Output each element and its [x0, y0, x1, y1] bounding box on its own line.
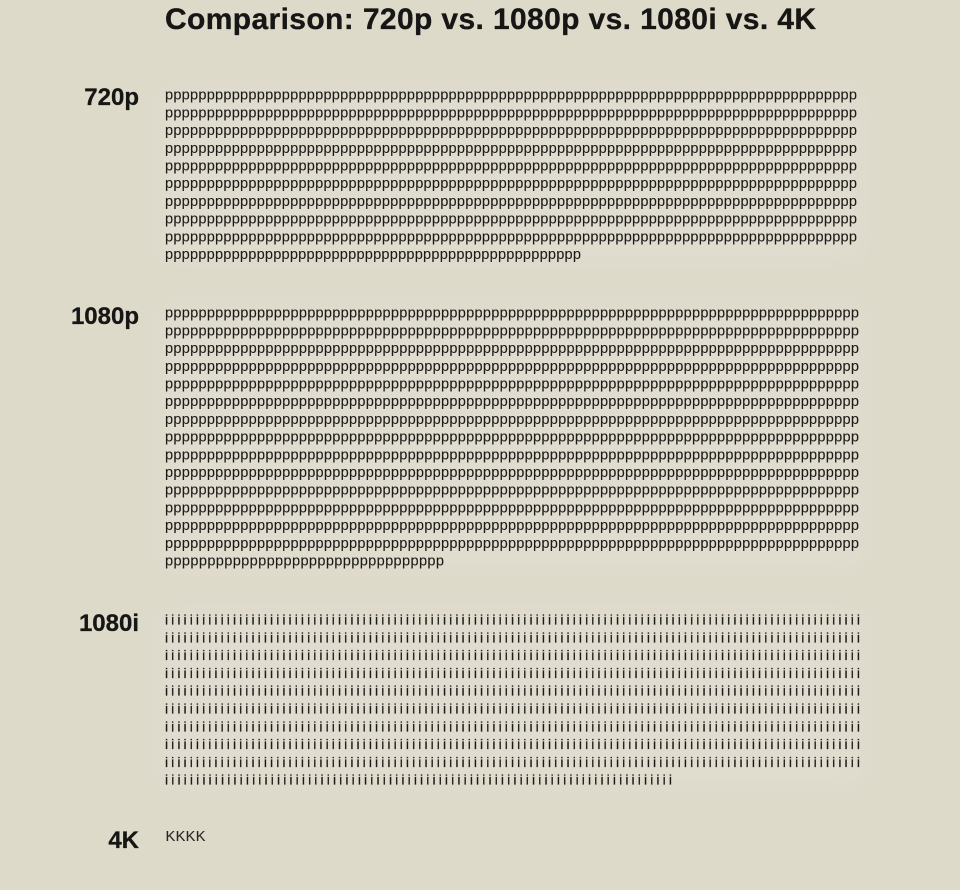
text block: 1080p rows of letter p: ppppppppppppppppppppppppppppppppppppppppppppppppppppppppppppppppppppppppppppppppppp: [165, 518, 859, 534]
text block: 720p rows of letter p: pppppppppppppppppppppppppppppppppppppppppppppppppp: [165, 247, 581, 263]
label: 4K: 4K: [108, 827, 140, 854]
text block: 1080p rows of letter p: ppppppppppppppppppppppppppppppppppppppppppppppppppppppppppppppppppppppppppppppppppp: [165, 412, 859, 428]
text block: 720p rows of letter p: [165, 88, 857, 263]
text block: 1080p rows of letter p: ppppppppppppppppppppppppppppppppppppppppppppppppppppppppppppppppppppppppppppppppppp: [165, 447, 859, 463]
text block: 1080i rows of letter i: iiiiiiiiiiiiiiiiiiiiiiiiiiiiiiiiiiiiiiiiiiiiiiiiiiiiiiiiiiiiiiiiiiiiiiiiiiiiiiiiiiiiiiiiiiiiiiiiiiiiiiiiiiiiiiiii: [165, 736, 860, 752]
label: 1080i: 1080i: [79, 610, 139, 637]
text block: 1080p rows of letter p: ppppppppppppppppppppppppppppppppppppppppppppppppppppppppppppppppppppppppppppppppppp: [165, 465, 859, 481]
text block: 1080i rows of letter i: iiiiiiiiiiiiiiiiiiiiiiiiiiiiiiiiiiiiiiiiiiiiiiiiiiiiiiiiiiiiiiiiiiiiiiiiiiiiiiiiiiiiiiiiiiiiiiiiiiiiiiiiiiiiiiiii: [165, 683, 860, 699]
text block: 1080p rows of letter p: ppppppppppppppppppppppppppppppppppppppppppppppppppppppppppppppppppppppppppppppppppp: [165, 376, 859, 392]
text block: 1080p rows of letter p: ppppppppppppppppppppppppppppppppppppppppppppppppppppppppppppppppppppppppppppppppppp: [165, 341, 859, 357]
text block: 1080i rows of letter i: iiiiiiiiiiiiiiiiiiiiiiiiiiiiiiiiiiiiiiiiiiiiiiiiiiiiiiiiiiiiiiiiiiiiiiiiiiiiiiiiiiiiiiiiiiiiiiiiiiiiiiiiiiiiiiiii: [165, 665, 860, 681]
text block: 720p rows of letter p: ppppppppppppppppppppppppppppppppppppppppppppppppppppppppppppppppppppppppppppppppppp: [165, 176, 857, 192]
text block: 720p rows of letter p: ppppppppppppppppppppppppppppppppppppppppppppppppppppppppppppppppppppppppppppppppppp: [165, 105, 857, 121]
text block: 1080p rows of letter p: ppppppppppppppppppppppppppppppppppppppppppppppppppppppppppppppppppppppppppppppppppp: [165, 536, 859, 552]
text block: 720p rows of letter p: ppppppppppppppppppppppppppppppppppppppppppppppppppppppppppppppppppppppppppppppppppp: [165, 212, 857, 228]
text block: 1080p rows of letter p: ppppppppppppppppppppppppppppppppppppppppppppppppppppppppppppppppppppppppppppppppppp: [165, 306, 859, 322]
label: 1080p: 1080p: [71, 303, 139, 330]
text block: 4K row of letter K: KKKK: [166, 829, 206, 845]
text block: 1080i rows of letter i: iiiiiiiiiiiiiiiiiiiiiiiiiiiiiiiiiiiiiiiiiiiiiiiiiiiiiiiiiiiiiiiiiiiiiiiiiiiiiiiiii: [165, 772, 672, 788]
text block: 1080p rows of letter p: ppppppppppppppppppppppppppppppppppppppppppppppppppppppppppppppppppppppppppppppppppp: [165, 483, 859, 499]
text block: 1080p rows of letter p: ppppppppppppppppppppppppppppppppppppppppppppppppppppppppppppppppppppppppppppppppppp: [165, 394, 859, 410]
text block: 720p rows of letter p: ppppppppppppppppppppppppppppppppppppppppppppppppppppppppppppppppppppppppppppppppppp: [165, 88, 857, 104]
text block: 1080i rows of letter i: iiiiiiiiiiiiiiiiiiiiiiiiiiiiiiiiiiiiiiiiiiiiiiiiiiiiiiiiiiiiiiiiiiiiiiiiiiiiiiiiiiiiiiiiiiiiiiiiiiiiiiiiiiiiiiiii: [165, 612, 860, 628]
text block: 720p rows of letter p: ppppppppppppppppppppppppppppppppppppppppppppppppppppppppppppppppppppppppppppppppppp: [165, 141, 857, 157]
text block: 1080p rows of letter p: ppppppppppppppppppppppppppppppppppppppppppppppppppppppppppppppppppppppppppppppppppp: [165, 430, 859, 446]
text block: 1080i rows of letter i: iiiiiiiiiiiiiiiiiiiiiiiiiiiiiiiiiiiiiiiiiiiiiiiiiiiiiiiiiiiiiiiiiiiiiiiiiiiiiiiiiiiiiiiiiiiiiiiiiiiiiiiiiiiiiiiii: [165, 647, 860, 663]
text block: 1080i rows of letter i: iiiiiiiiiiiiiiiiiiiiiiiiiiiiiiiiiiiiiiiiiiiiiiiiiiiiiiiiiiiiiiiiiiiiiiiiiiiiiiiiiiiiiiiiiiiiiiiiiiiiiiiiiiiiiiiii: [165, 754, 860, 770]
text block: 720p rows of letter p: ppppppppppppppppppppppppppppppppppppppppppppppppppppppppppppppppppppppppppppppppppp: [165, 194, 857, 210]
title: Comparison: 720p vs. 1080p vs. 1080i vs. 4K: [165, 3, 816, 36]
text block: 1080i rows of letter i: iiiiiiiiiiiiiiiiiiiiiiiiiiiiiiiiiiiiiiiiiiiiiiiiiiiiiiiiiiiiiiiiiiiiiiiiiiiiiiiiiiiiiiiiiiiiiiiiiiiiiiiiiiiiiiiii: [165, 718, 860, 734]
text block: 720p rows of letter p: ppppppppppppppppppppppppppppppppppppppppppppppppppppppppppppppppppppppppppppppppppp: [165, 229, 857, 245]
text block: 1080p rows of letter p: [165, 306, 859, 570]
text block: 1080i rows of letter i: [165, 612, 860, 788]
text block: 1080i rows of letter i: iiiiiiiiiiiiiiiiiiiiiiiiiiiiiiiiiiiiiiiiiiiiiiiiiiiiiiiiiiiiiiiiiiiiiiiiiiiiiiiiiiiiiiiiiiiiiiiiiiiiiiiiiiiiiiiii: [165, 629, 860, 645]
text block: 1080p rows of letter p: ppppppppppppppppppppppppppppppppppppppppppppppppppppppppppppppppppppppppppppppppppp: [165, 359, 859, 375]
text block: 1080p rows of letter p: ppppppppppppppppppppppppppppppppppppppppppppppppppppppppppppppppppppppppppppppppppp: [165, 500, 859, 516]
text block: 1080i rows of letter i: iiiiiiiiiiiiiiiiiiiiiiiiiiiiiiiiiiiiiiiiiiiiiiiiiiiiiiiiiiiiiiiiiiiiiiiiiiiiiiiiiiiiiiiiiiiiiiiiiiiiiiiiiiiiiiiii: [165, 700, 860, 716]
text block: 1080p rows of letter p: ppppppppppppppppppppppppppppppppp: [165, 554, 444, 570]
text block: 1080p rows of letter p: ppppppppppppppppppppppppppppppppppppppppppppppppppppppppppppppppppppppppppppppppppp: [165, 323, 859, 339]
text block: 720p rows of letter p: ppppppppppppppppppppppppppppppppppppppppppppppppppppppppppppppppppppppppppppppppppp: [165, 158, 857, 174]
text block: 720p rows of letter p: ppppppppppppppppppppppppppppppppppppppppppppppppppppppppppppppppppppppppppppppppppp: [165, 123, 857, 139]
label: 720p: 720p: [84, 84, 139, 111]
